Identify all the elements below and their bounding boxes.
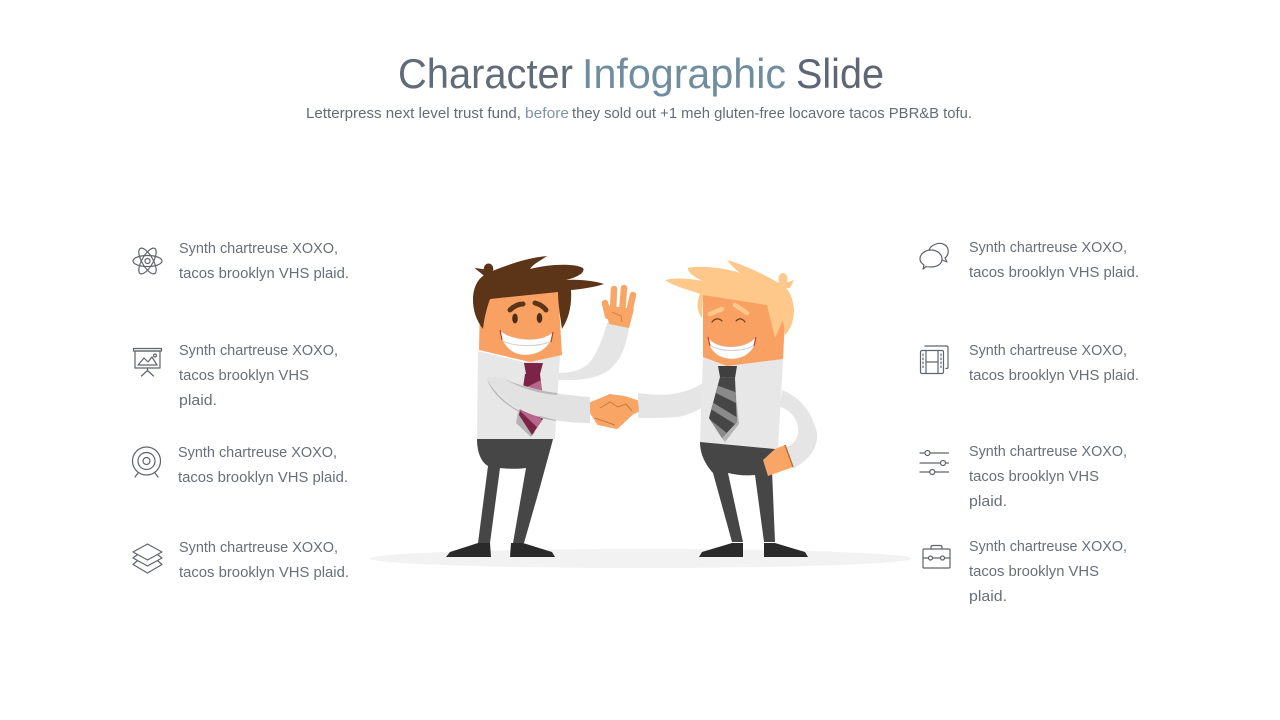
text: Synth chartreuse XOXO, <box>969 342 1127 359</box>
hair <box>665 260 794 338</box>
raised arm <box>558 323 629 380</box>
text <box>179 240 349 282</box>
text <box>969 342 1139 384</box>
face <box>703 293 785 366</box>
shoes <box>446 543 555 557</box>
pants <box>700 442 775 542</box>
icon: layers <box>133 544 162 573</box>
eyes <box>512 313 542 324</box>
text <box>969 443 1127 510</box>
icon: briefcase <box>923 546 950 568</box>
back arm <box>780 390 817 469</box>
closed eyes <box>712 319 745 322</box>
character: left man waving and shaking hands <box>446 256 703 557</box>
shirt <box>477 351 560 439</box>
text: Synth chartreuse XOXO, <box>179 539 338 556</box>
pants <box>477 439 553 543</box>
hair <box>473 256 604 329</box>
icon: target <box>132 447 160 477</box>
left item 1 <box>133 240 349 282</box>
text: Synth chartreuse XOXO, <box>969 443 1127 460</box>
sleeve of right man <box>638 383 703 418</box>
text: plaid. <box>969 493 1007 510</box>
text: Synth chartreuse XOXO, <box>969 538 1127 555</box>
text: tacos brooklyn VHS <box>969 468 1099 485</box>
eyebrows <box>510 303 546 310</box>
text <box>179 342 338 409</box>
shirt <box>700 357 783 449</box>
text <box>969 239 1139 281</box>
tie <box>706 366 739 442</box>
right item 3 <box>920 443 1127 510</box>
text: tacos brooklyn VHS <box>969 563 1099 580</box>
subtitle: they sold out +1 meh gluten-free locavore tacos PBR&B tofu. <box>572 105 972 122</box>
text: Synth chartreuse XOXO, <box>178 444 337 461</box>
ground shadow <box>370 549 912 568</box>
text: Synth chartreuse XOXO, <box>179 240 338 257</box>
front arm <box>487 377 590 423</box>
title: Infographic <box>582 50 786 97</box>
face <box>479 288 562 362</box>
left item 2 <box>134 342 338 409</box>
text <box>179 539 349 581</box>
tie <box>516 363 545 437</box>
smile <box>708 337 756 359</box>
icon: film strip <box>920 346 948 374</box>
left item 4 <box>133 539 349 581</box>
text: tacos brooklyn VHS plaid. <box>178 469 348 486</box>
left item 3 <box>132 444 348 486</box>
handshake <box>591 395 638 428</box>
icon: sliders <box>920 450 948 474</box>
right item 4 <box>923 538 1127 605</box>
right item 2 <box>920 342 1139 384</box>
text: Synth chartreuse XOXO, <box>179 342 338 359</box>
title: Character <box>398 50 573 97</box>
title: Slide <box>796 50 884 97</box>
title <box>398 50 884 97</box>
right item 1 <box>920 239 1139 281</box>
text: plaid. <box>969 588 1007 605</box>
text: tacos brooklyn VHS plaid. <box>179 564 349 581</box>
icon: chat bubbles <box>920 243 948 269</box>
hand on hip <box>763 445 793 476</box>
text: tacos brooklyn VHS plaid. <box>969 264 1139 281</box>
character: right man with hand on hip <box>665 260 817 557</box>
shoes <box>699 543 808 557</box>
text <box>969 538 1127 605</box>
subtitle: before <box>525 105 569 122</box>
subtitle: Letterpress next level trust fund, <box>306 105 521 122</box>
text: tacos brooklyn VHS <box>179 367 309 384</box>
text: tacos brooklyn VHS plaid. <box>969 367 1139 384</box>
raised hand <box>604 288 634 328</box>
text: Synth chartreuse XOXO, <box>969 239 1127 256</box>
smile <box>500 330 553 355</box>
icon: presentation board <box>134 348 162 376</box>
eyebrows <box>710 305 747 314</box>
icon: atom <box>133 246 162 276</box>
text: plaid. <box>179 392 217 409</box>
text <box>178 444 348 486</box>
text: tacos brooklyn VHS plaid. <box>179 265 349 282</box>
subtitle <box>306 105 972 122</box>
